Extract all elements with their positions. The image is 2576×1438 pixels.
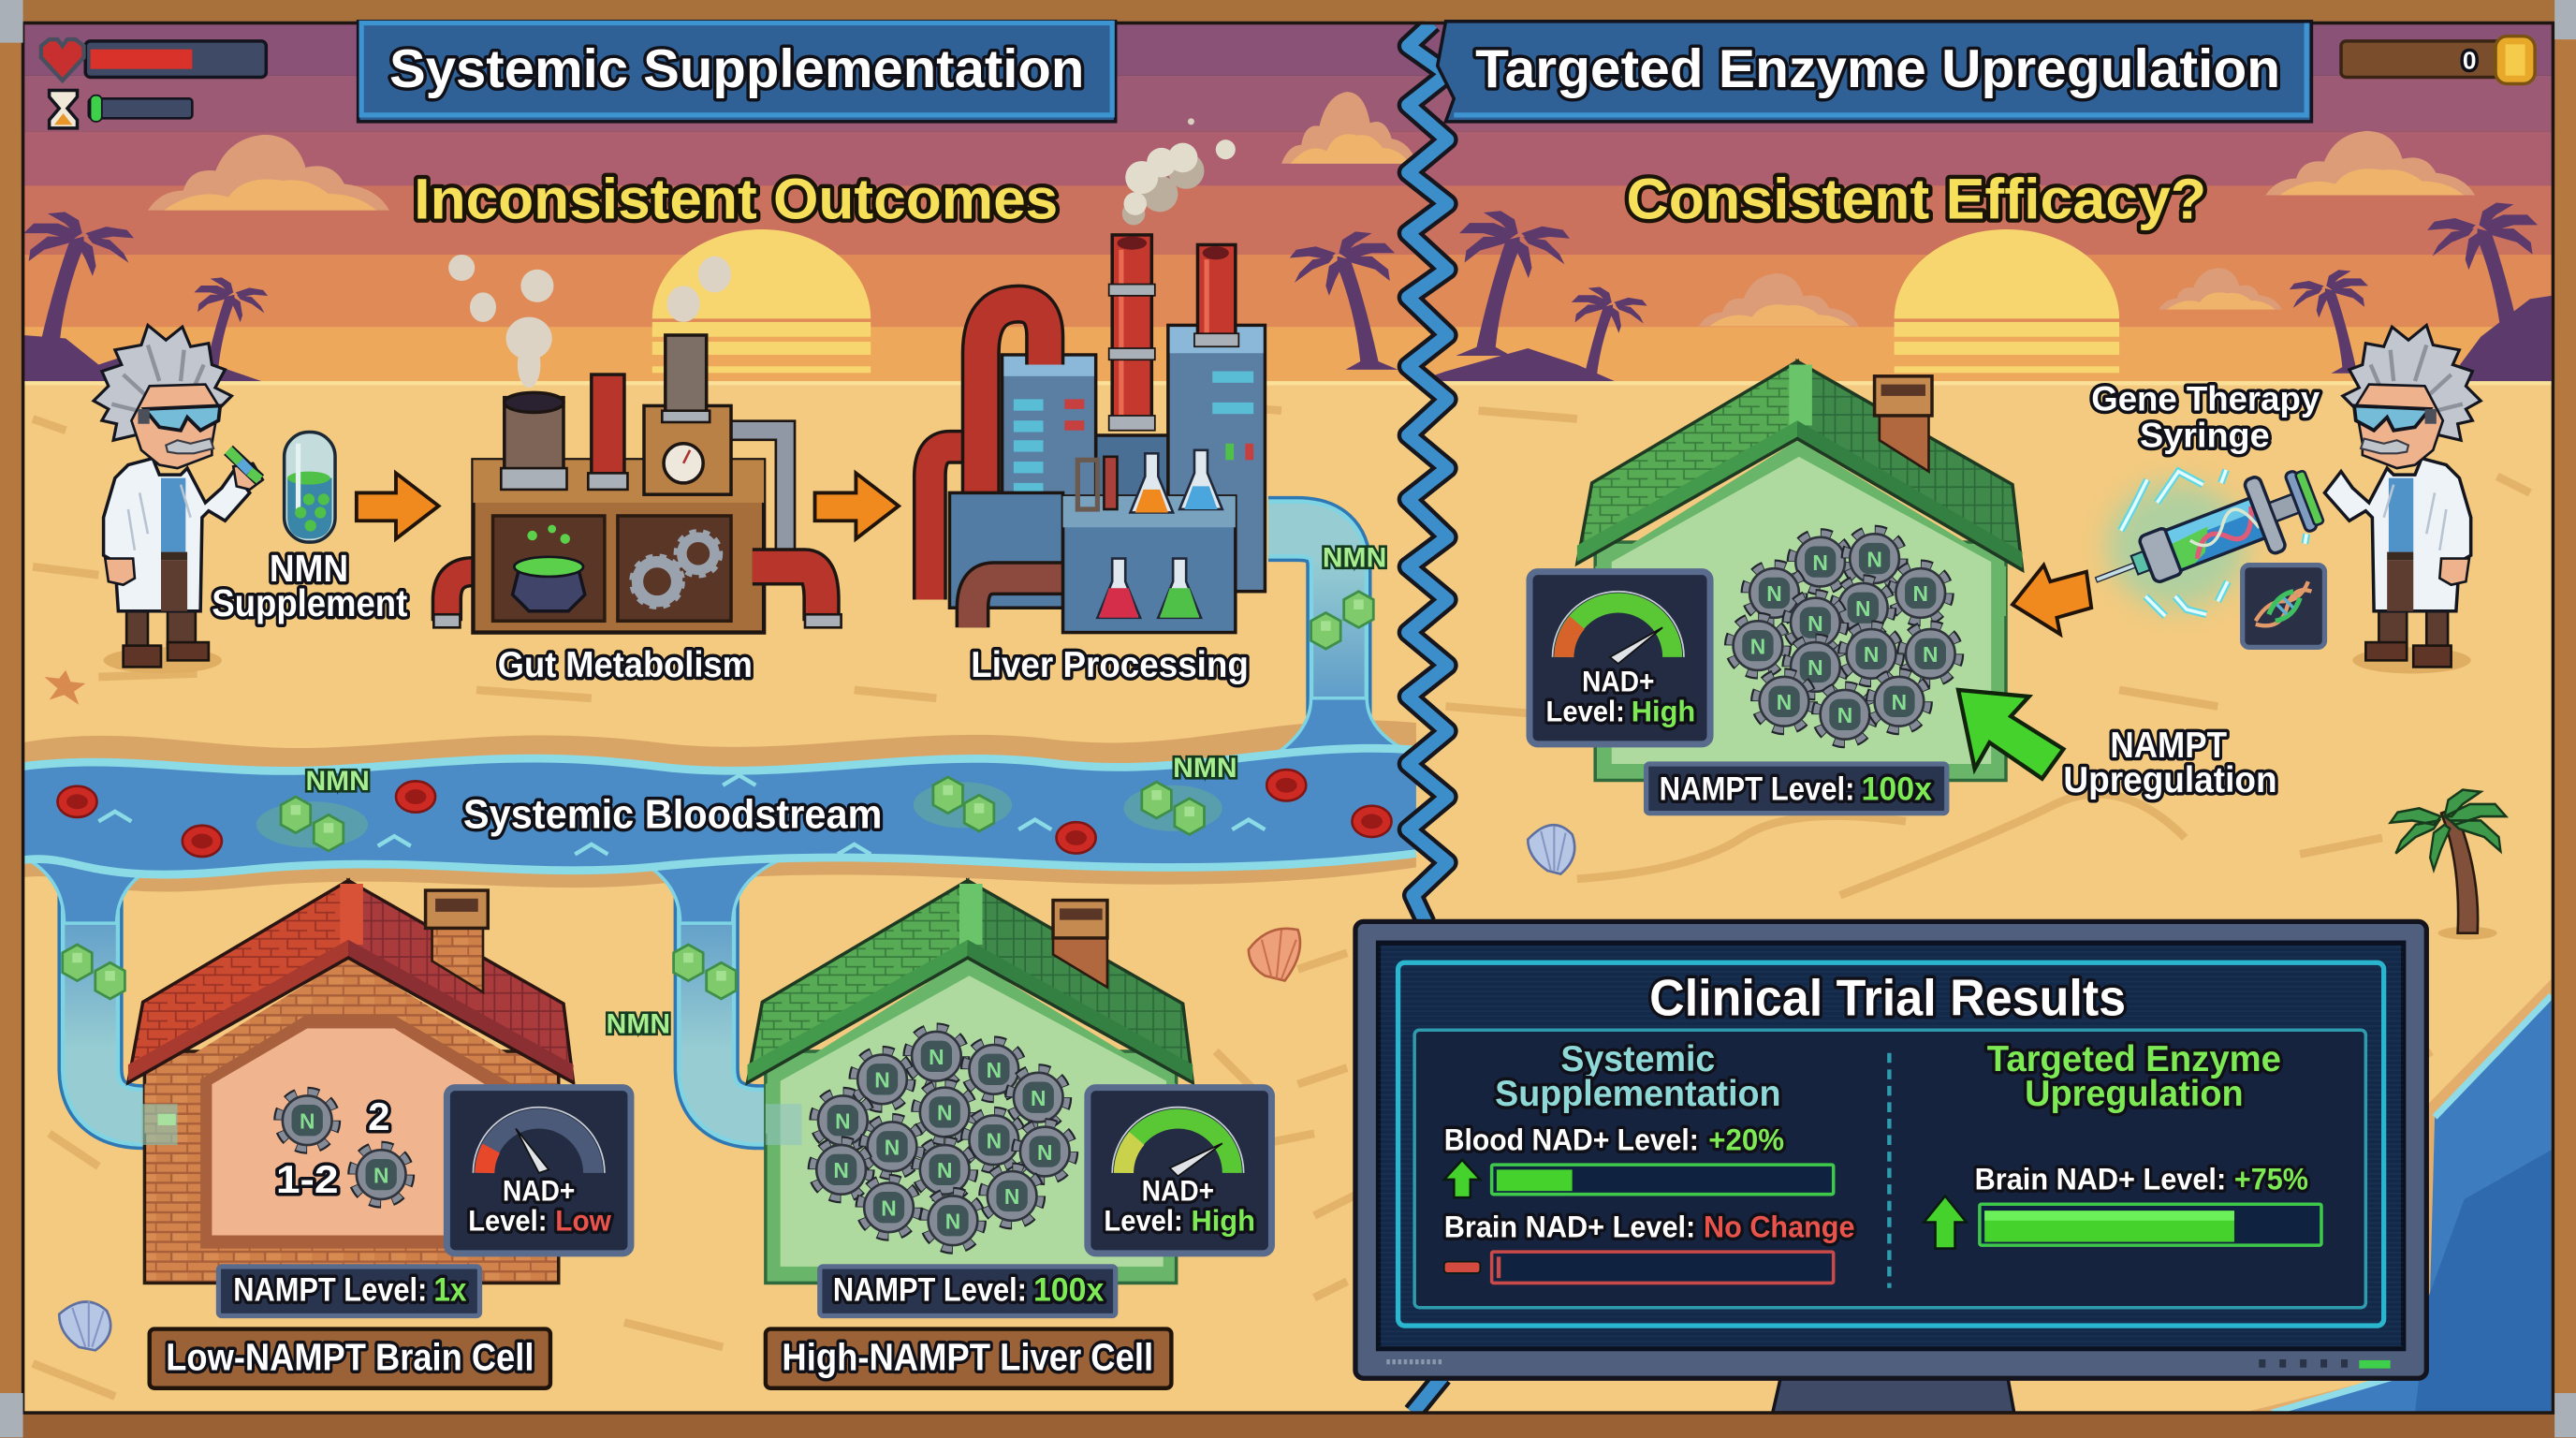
gears: targeted cell: N xyxy=(1912,581,1928,606)
gauge panel: low: Low xyxy=(555,1203,611,1237)
label: gene therapy syringe: Syringe xyxy=(2140,416,2270,454)
label: low-NAMPT brain cell: Low-NAMPT Brain Cell xyxy=(166,1335,534,1378)
tag: NAMPT level 100x targeted xyxy=(1647,764,1947,814)
gears: targeted cell: N xyxy=(1750,634,1765,658)
label: NMN supplement xyxy=(212,547,407,624)
gears: targeted cell xyxy=(1731,532,1957,741)
HUD: health bar xyxy=(41,39,266,81)
gears: targeted cell: N xyxy=(1864,642,1879,667)
red blood cells xyxy=(57,770,1392,857)
liver processing factory xyxy=(929,235,1265,633)
gear counts: 1-2 xyxy=(276,1157,339,1201)
gears: liver cell: N xyxy=(929,1045,944,1069)
label: high-NAMPT liver cell: High-NAMPT Liver Cell xyxy=(782,1335,1153,1378)
icon: orange and blue flasks xyxy=(1131,450,1222,512)
gears: targeted cell: N xyxy=(1837,703,1852,727)
NMN labels: NMN xyxy=(607,1009,670,1040)
gears: liver cell: N xyxy=(885,1136,900,1160)
label: NAMPT upregulation: Upregulation xyxy=(2063,760,2277,800)
gears: liver cell: N xyxy=(874,1068,890,1093)
column heading: targeted: Upregulation xyxy=(2025,1074,2244,1114)
gears: liver cell: N xyxy=(835,1108,851,1133)
icon: syringe glow xyxy=(2108,483,2246,608)
gears: liver cell: N xyxy=(881,1196,897,1220)
label: gene therapy syringe: Gene Therapy xyxy=(2091,380,2320,418)
icon: hand with green test tube xyxy=(228,450,263,490)
tag: NAMPT level 100x liver: NAMPT Level: xyxy=(833,1272,1027,1309)
NMN labels xyxy=(305,542,1386,1040)
gut metabolism machine xyxy=(433,335,842,633)
metric: blood NAD+: Blood NAD+ Level: xyxy=(1444,1123,1699,1156)
gears: liver cell xyxy=(814,1029,1072,1248)
results monitor xyxy=(1355,921,2426,1413)
gears: targeted cell: N xyxy=(1866,547,1882,571)
banner: targeted enzyme upregulation: Targeted Enzyme Upregulation xyxy=(1475,39,2280,99)
bloodstream tributaries xyxy=(24,529,1410,1117)
gauge panel: high liver: Level: xyxy=(1104,1203,1183,1237)
energy sparks xyxy=(2121,470,2306,616)
monitor title: Clinical Trial Results xyxy=(1649,969,2126,1026)
gears: targeted cell: N xyxy=(1892,690,1907,714)
sea at lower right xyxy=(2243,979,2552,1413)
gears: targeted cell: N xyxy=(1808,611,1823,636)
right sun xyxy=(1895,229,2119,373)
label: systemic bloodstream: Systemic Bloodstream xyxy=(463,791,882,837)
icon: seashell blue right xyxy=(1528,825,1574,874)
arrow: to gut xyxy=(357,473,439,539)
tag: NAMPT level 100x targeted: NAMPT Level: xyxy=(1660,771,1855,808)
gauge panel: high liver: High xyxy=(1191,1203,1255,1237)
gauge panel: high targeted: Level: xyxy=(1546,694,1625,727)
column heading: systemic: Systemic xyxy=(1560,1039,1715,1079)
label: high-NAMPT liver cell xyxy=(766,1329,1171,1388)
monitor stand xyxy=(1773,1376,2014,1413)
gauge panel: high targeted xyxy=(1530,572,1710,744)
NMN labels: NMN xyxy=(1173,753,1237,784)
systemic bloodstream river xyxy=(23,744,1416,878)
gears: targeted cell: N xyxy=(1808,655,1823,680)
metric: brain NAD+ targeted: Brain NAD+ Level: xyxy=(1975,1162,2226,1196)
column heading: targeted: Targeted Enzyme xyxy=(1987,1039,2281,1079)
gear counts xyxy=(276,1094,390,1201)
gauge panel: high targeted: High xyxy=(1632,694,1695,727)
green palm tree xyxy=(2391,790,2506,940)
arrow: to liver xyxy=(815,473,899,539)
gears: liver cell: N xyxy=(1037,1140,1052,1165)
metric: brain NAD+ no change xyxy=(1444,1210,1855,1283)
gears: liver cell: N xyxy=(1004,1184,1019,1209)
label: gene therapy syringe xyxy=(2091,380,2320,454)
icon: DNA tile xyxy=(2243,565,2324,647)
gauge panel: high liver: NAD+ xyxy=(1142,1174,1214,1208)
gears: targeted cell: N xyxy=(1855,596,1871,621)
gauge panel: high liver xyxy=(1088,1088,1271,1254)
metric: blood NAD+ xyxy=(1444,1123,1834,1197)
sand ripples xyxy=(33,403,2530,1397)
metric: brain NAD+ no change: Brain NAD+ Level: xyxy=(1444,1210,1695,1243)
tag: NAMPT level 100x liver xyxy=(820,1267,1116,1316)
heading: inconsistent outcomes: Inconsistent Outcomes xyxy=(414,167,1058,231)
gears: liver cell: N xyxy=(937,1158,952,1182)
icon: starfish xyxy=(44,670,85,705)
gears: liver cell: N xyxy=(1031,1086,1046,1110)
gear counts: 2 xyxy=(368,1094,390,1138)
icon: NMN capsule xyxy=(285,432,335,542)
NMN labels: NMN xyxy=(305,766,370,797)
gears: brain cell: N xyxy=(373,1163,388,1187)
column heading: systemic: Supplementation xyxy=(1495,1074,1781,1114)
gauge panel: low: Level: xyxy=(468,1203,547,1237)
left sun xyxy=(652,229,871,373)
gears: targeted cell: N xyxy=(1766,581,1782,606)
scientist right xyxy=(2324,325,2481,673)
gears: targeted cell: N xyxy=(1777,690,1792,714)
divider: zigzag channel xyxy=(1408,23,1447,1413)
gears: liver cell: N xyxy=(987,1129,1002,1153)
icon: seashell blue left xyxy=(59,1301,110,1350)
gears: liver cell: N xyxy=(833,1158,849,1182)
tag: NAMPT level 100x liver: 100x xyxy=(1033,1272,1105,1309)
palm silhouettes and islands xyxy=(20,202,2552,387)
label: NMN supplement: NMN xyxy=(270,547,348,590)
gears: targeted cell: N xyxy=(1812,550,1828,575)
banner: systemic supplementation xyxy=(359,22,1116,122)
tag: NAMPT level 100x targeted: 100x xyxy=(1862,771,1932,808)
column heading: targeted xyxy=(1987,1039,2281,1114)
sand beach xyxy=(0,381,2576,1437)
label: gut metabolism: Gut Metabolism xyxy=(498,645,753,685)
gears: liver cell: N xyxy=(987,1058,1002,1082)
icon: seashell pink xyxy=(1249,929,1300,981)
smoke puffs: gut xyxy=(448,255,731,388)
gears: liver cell: N xyxy=(945,1210,960,1234)
column heading: systemic xyxy=(1495,1039,1781,1114)
icon: cauldron xyxy=(513,525,585,611)
icon: gene therapy syringe xyxy=(2082,460,2328,617)
dashed column divider xyxy=(1888,1053,1891,1288)
gears: liver cell: N xyxy=(937,1101,952,1125)
wet sand banks xyxy=(23,721,1416,892)
HUD: coin counter: 0 xyxy=(2463,47,2477,75)
sky background bands xyxy=(0,0,2576,385)
gauge panel: low xyxy=(446,1088,631,1254)
banner: systemic supplementation: Systemic Supplementation xyxy=(389,39,1084,99)
gears: brain cell xyxy=(280,1093,408,1202)
liver cell house xyxy=(748,881,1193,1283)
arrow: green upregulation xyxy=(1958,690,2063,779)
metric: blood NAD+: +20% xyxy=(1708,1123,1784,1156)
scientist left xyxy=(94,325,263,673)
arrow: orange into cell xyxy=(2012,565,2091,634)
tag: NAMPT level 1x xyxy=(218,1267,479,1316)
banner: targeted enzyme upregulation xyxy=(1438,22,2311,122)
metric: brain NAD+ no change: No Change xyxy=(1704,1210,1855,1243)
label: liver processing: Liver Processing xyxy=(971,645,1249,685)
clouds xyxy=(148,92,2475,326)
tag: NAMPT level 1x: 1x xyxy=(433,1272,467,1309)
label: low-NAMPT brain cell xyxy=(150,1329,550,1388)
label: NAMPT upregulation xyxy=(2063,726,2277,800)
gauge panel: low: NAD+ xyxy=(503,1174,575,1208)
heading: consistent efficacy: Consistent Efficacy? xyxy=(1627,167,2206,231)
tag: NAMPT level 1x: NAMPT Level: xyxy=(233,1272,427,1309)
metric: brain NAD+ targeted xyxy=(1924,1162,2321,1249)
label: NAMPT upregulation: NAMPT xyxy=(2110,726,2227,766)
smoke puffs: factory xyxy=(1122,118,1236,225)
icon: machine gears xyxy=(633,533,720,606)
gauge panel: high targeted: NAD+ xyxy=(1582,665,1654,698)
targeted enzyme house xyxy=(1577,361,2023,780)
icon: red and green flasks xyxy=(1097,559,1201,618)
gears: targeted cell: N xyxy=(1923,642,1938,667)
label: NMN supplement: Supplement xyxy=(212,581,407,624)
metric: brain NAD+ targeted: +75% xyxy=(2234,1162,2308,1196)
NMN particles xyxy=(63,592,1373,999)
NMN labels: NMN xyxy=(1323,542,1386,573)
brain cell house xyxy=(128,881,574,1283)
gears: brain cell: N xyxy=(300,1108,315,1133)
HUD: time bar xyxy=(50,91,192,128)
HUD: coin counter xyxy=(2341,37,2535,83)
